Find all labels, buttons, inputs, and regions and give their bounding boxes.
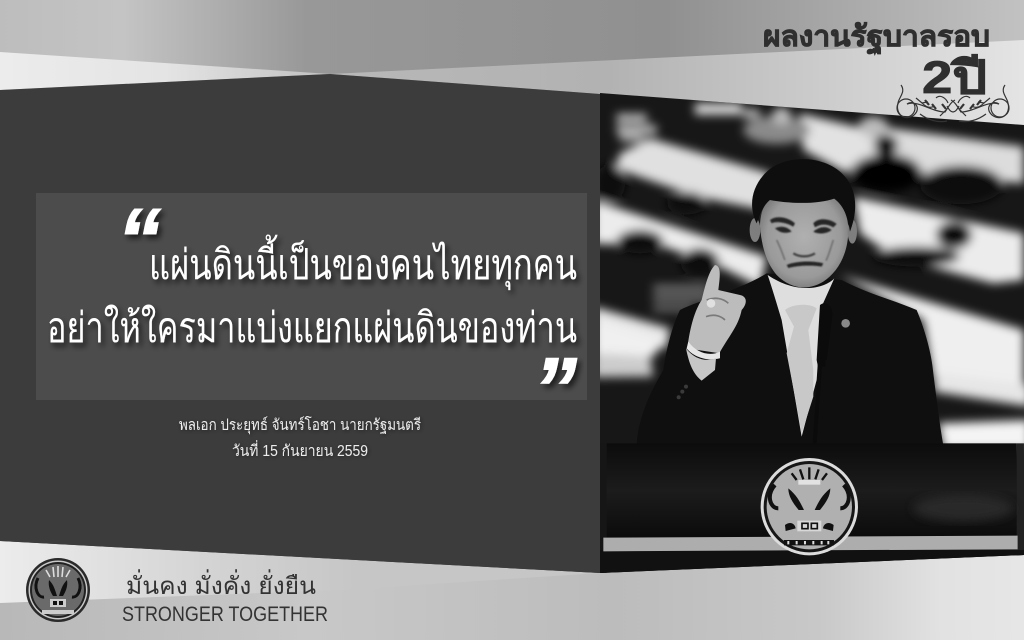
tie <box>785 305 817 433</box>
panel: quote box <box>36 190 587 438</box>
attribution text: วันที่ 15 กันยายน 2559 <box>232 440 368 460</box>
icon: floral ornament <box>897 85 1009 122</box>
attribution text <box>179 416 421 460</box>
person: prime minister <box>637 159 943 445</box>
quote text <box>47 234 577 351</box>
slogan: มั่นคง มั่งคั่ง ยั่งยืน <box>126 569 316 600</box>
footer background <box>0 541 1024 640</box>
suit jacket <box>637 273 943 445</box>
photo: prime minister at podium <box>593 90 1024 583</box>
opening quotation mark: “ <box>117 190 161 289</box>
podium seal <box>761 458 858 555</box>
wristband and cuff <box>687 342 720 359</box>
slogan <box>122 569 328 626</box>
attribution text: พลเอก ประยุทธ์ จันทร์โอชา นายกรัฐมนตรี <box>179 416 421 435</box>
closing quotation mark: ” <box>533 339 577 438</box>
quote text: แผ่นดินนี้เป็นของคนไทยทุกคน <box>149 234 577 291</box>
shirt <box>768 275 834 437</box>
slogan: STRONGER TOGETHER <box>122 603 328 626</box>
top banner background <box>0 0 1024 130</box>
microphone <box>816 303 824 366</box>
panel: dark quote background <box>0 74 600 573</box>
quote text: อย่าให้ใครมาแบ่งแยกแผ่นดินของท่าน <box>47 304 577 351</box>
eyebrows, eyes, mouth <box>770 217 837 268</box>
heading: government 2-year results: ผลงานรัฐบาลรอบ <box>763 21 990 55</box>
hair <box>752 159 855 232</box>
neck and face <box>760 190 848 287</box>
podium metal strip <box>603 536 1018 551</box>
podium <box>600 443 1024 583</box>
raised hand <box>687 265 746 353</box>
heading: government 2-year results <box>763 21 990 103</box>
icon: government seal <box>26 558 90 622</box>
lapel pin <box>841 319 850 328</box>
heading: government 2-year results: 2ปี <box>922 52 987 103</box>
photo background: blurred seated audience <box>593 103 1024 450</box>
